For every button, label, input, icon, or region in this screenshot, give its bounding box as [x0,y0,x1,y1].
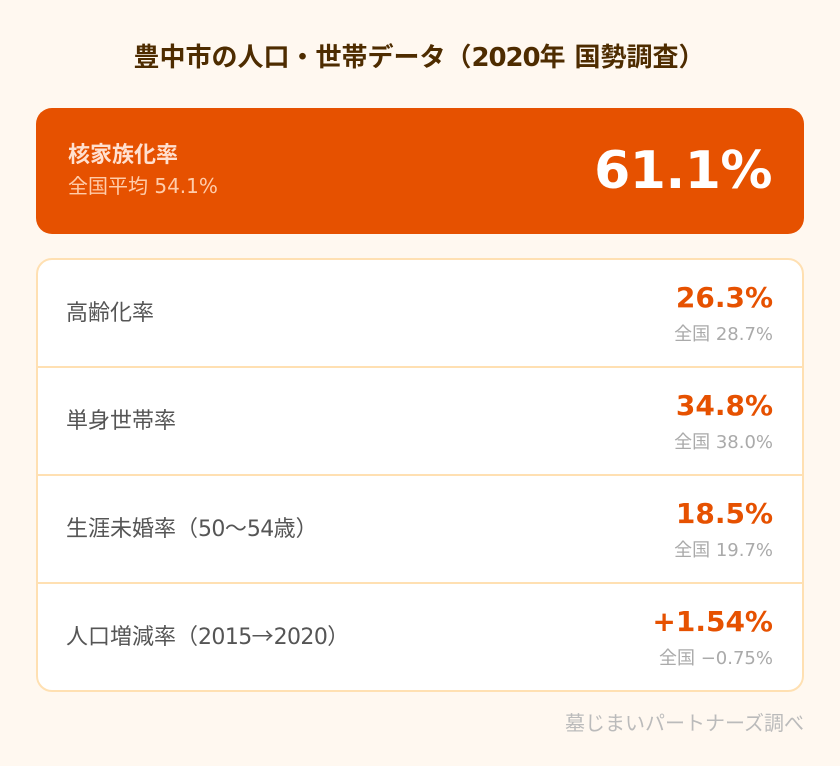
national: 全国 38.0% [674,432,773,453]
value: 18.5% [676,497,773,530]
panel: highlight card [36,108,804,234]
label: 単身世帯率 [66,409,176,434]
national: 全国 −0.75% [659,648,773,669]
highlight label: 核家族化率 [68,143,178,168]
panel: statistics list [36,258,804,692]
highlight value: 61.1% [594,141,772,201]
national: 全国 19.7% [674,540,773,561]
source note: 墓じまいパートナーズ調べ [565,711,804,735]
label: 生涯未婚率（50～54歳） [66,511,318,543]
row: never married [38,476,802,584]
row: single households [38,368,802,476]
value: +1.54% [652,605,773,638]
national: 全国 28.7% [674,324,773,345]
row: aging rate [38,260,802,368]
label: 人口増減率（2015→2020） [66,619,349,651]
value: 34.8% [676,389,773,422]
national average: 全国平均 54.1% [68,174,218,198]
row: population change [66,605,773,669]
title: 豊中市の人口・世帯データ（2020年 国勢調査） [133,43,705,73]
value: 26.3% [676,281,773,314]
label: 高齢化率 [66,301,154,326]
